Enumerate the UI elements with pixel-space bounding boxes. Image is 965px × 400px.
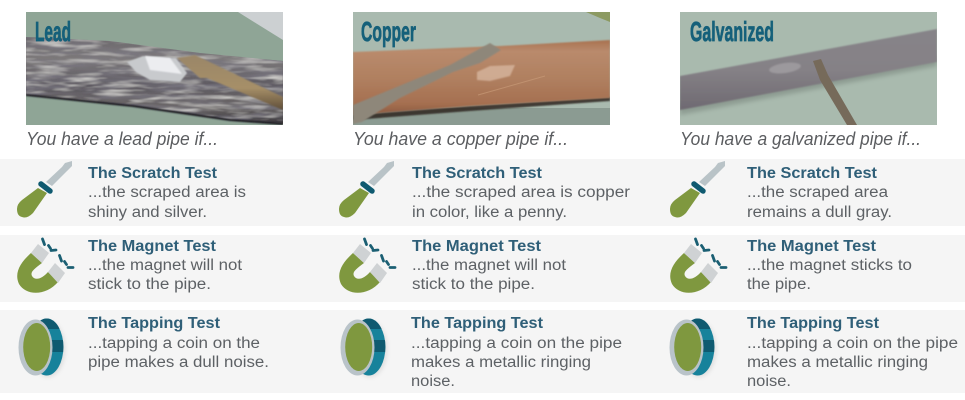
text: lead tapping test: ...tapping a coin on the [88, 335, 260, 352]
text: galvanized tapping test: noise. [747, 373, 791, 390]
caption: lead: You have a lead pipe if... [26, 129, 218, 149]
text: copper tapping test: makes a metallic ringing [411, 354, 591, 371]
text: copper tapping test: The Tapping Test [411, 315, 543, 332]
text: galvanized scratch test: The Scratch Test [747, 165, 877, 182]
text: copper magnet test: ...the magnet will not [412, 257, 567, 274]
caption: galvanized: You have a galvanized pipe if... [680, 129, 921, 149]
text: galvanized magnet test: The Magnet Test [747, 238, 876, 255]
text: lead magnet test: The Magnet Test [88, 238, 216, 255]
text: copper tapping test [411, 315, 622, 390]
text: lead magnet test: stick to the pipe. [88, 276, 211, 293]
text: galvanized magnet test: the pipe. [747, 276, 811, 293]
text: galvanized tapping test: The Tapping Test [747, 315, 879, 332]
text: copper tapping test: ...tapping a coin on the pipe [411, 335, 622, 352]
text: galvanized tapping test: ...tapping a coin on the pipe [747, 335, 958, 352]
icon: coin, copper [340, 318, 387, 377]
panel: copper photo [353, 12, 610, 125]
heading: Lead: Lead [35, 16, 71, 47]
icon: magnet, copper [339, 239, 395, 293]
text: lead magnet test [88, 238, 243, 293]
icon: magnet, lead [17, 239, 73, 293]
text: copper magnet test: stick to the pipe. [412, 276, 535, 293]
text: galvanized tapping test: makes a metallic ringing [747, 354, 928, 371]
icon: screwdriver, copper [339, 161, 394, 218]
text: copper magnet test [412, 238, 567, 293]
text: copper scratch test: The Scratch Test [412, 165, 542, 182]
text: lead scratch test: The Scratch Test [88, 165, 217, 182]
text: lead scratch test: ...the scraped area is [88, 184, 246, 201]
text: copper scratch test [412, 165, 630, 221]
text: galvanized magnet test [747, 238, 912, 293]
text: copper magnet test: The Magnet Test [412, 238, 541, 255]
text: lead tapping test: pipe makes a dull noise. [88, 354, 269, 371]
text: lead scratch test: shiny and silver. [88, 204, 207, 221]
panel: galvanized photo [680, 12, 937, 125]
text: galvanized scratch test: ...the scraped area [747, 184, 888, 201]
background band: magnet test [0, 235, 965, 302]
heading: Copper: Copper [361, 16, 416, 47]
text: lead magnet test: ...the magnet will not [88, 257, 243, 274]
icon: screwdriver, galvanized [670, 161, 725, 218]
text: galvanized scratch test [747, 165, 892, 221]
text: galvanized scratch test: remains a dull gray. [747, 204, 892, 221]
text: galvanized tapping test [747, 315, 958, 390]
text: copper tapping test: noise. [411, 373, 455, 390]
text: lead tapping test [88, 315, 269, 371]
icon: screwdriver, lead [17, 161, 72, 218]
icon: coin, lead [18, 318, 65, 377]
text: lead tapping test: The Tapping Test [88, 315, 220, 332]
icon: magnet, galvanized [670, 239, 726, 293]
icon: coin, galvanized [670, 318, 716, 377]
background band: tapping test [0, 310, 965, 393]
heading: Galvanized: Galvanized [690, 16, 774, 47]
text: galvanized magnet test: ...the magnet sticks to [747, 257, 912, 274]
text: copper scratch test: in color, like a penny. [412, 204, 567, 221]
background band: scratch test [0, 159, 965, 226]
text: lead scratch test [88, 165, 246, 221]
panel: lead photo [26, 12, 283, 125]
text: copper scratch test: ...the scraped area is copper [412, 184, 630, 201]
caption: copper: You have a copper pipe if... [353, 129, 568, 149]
